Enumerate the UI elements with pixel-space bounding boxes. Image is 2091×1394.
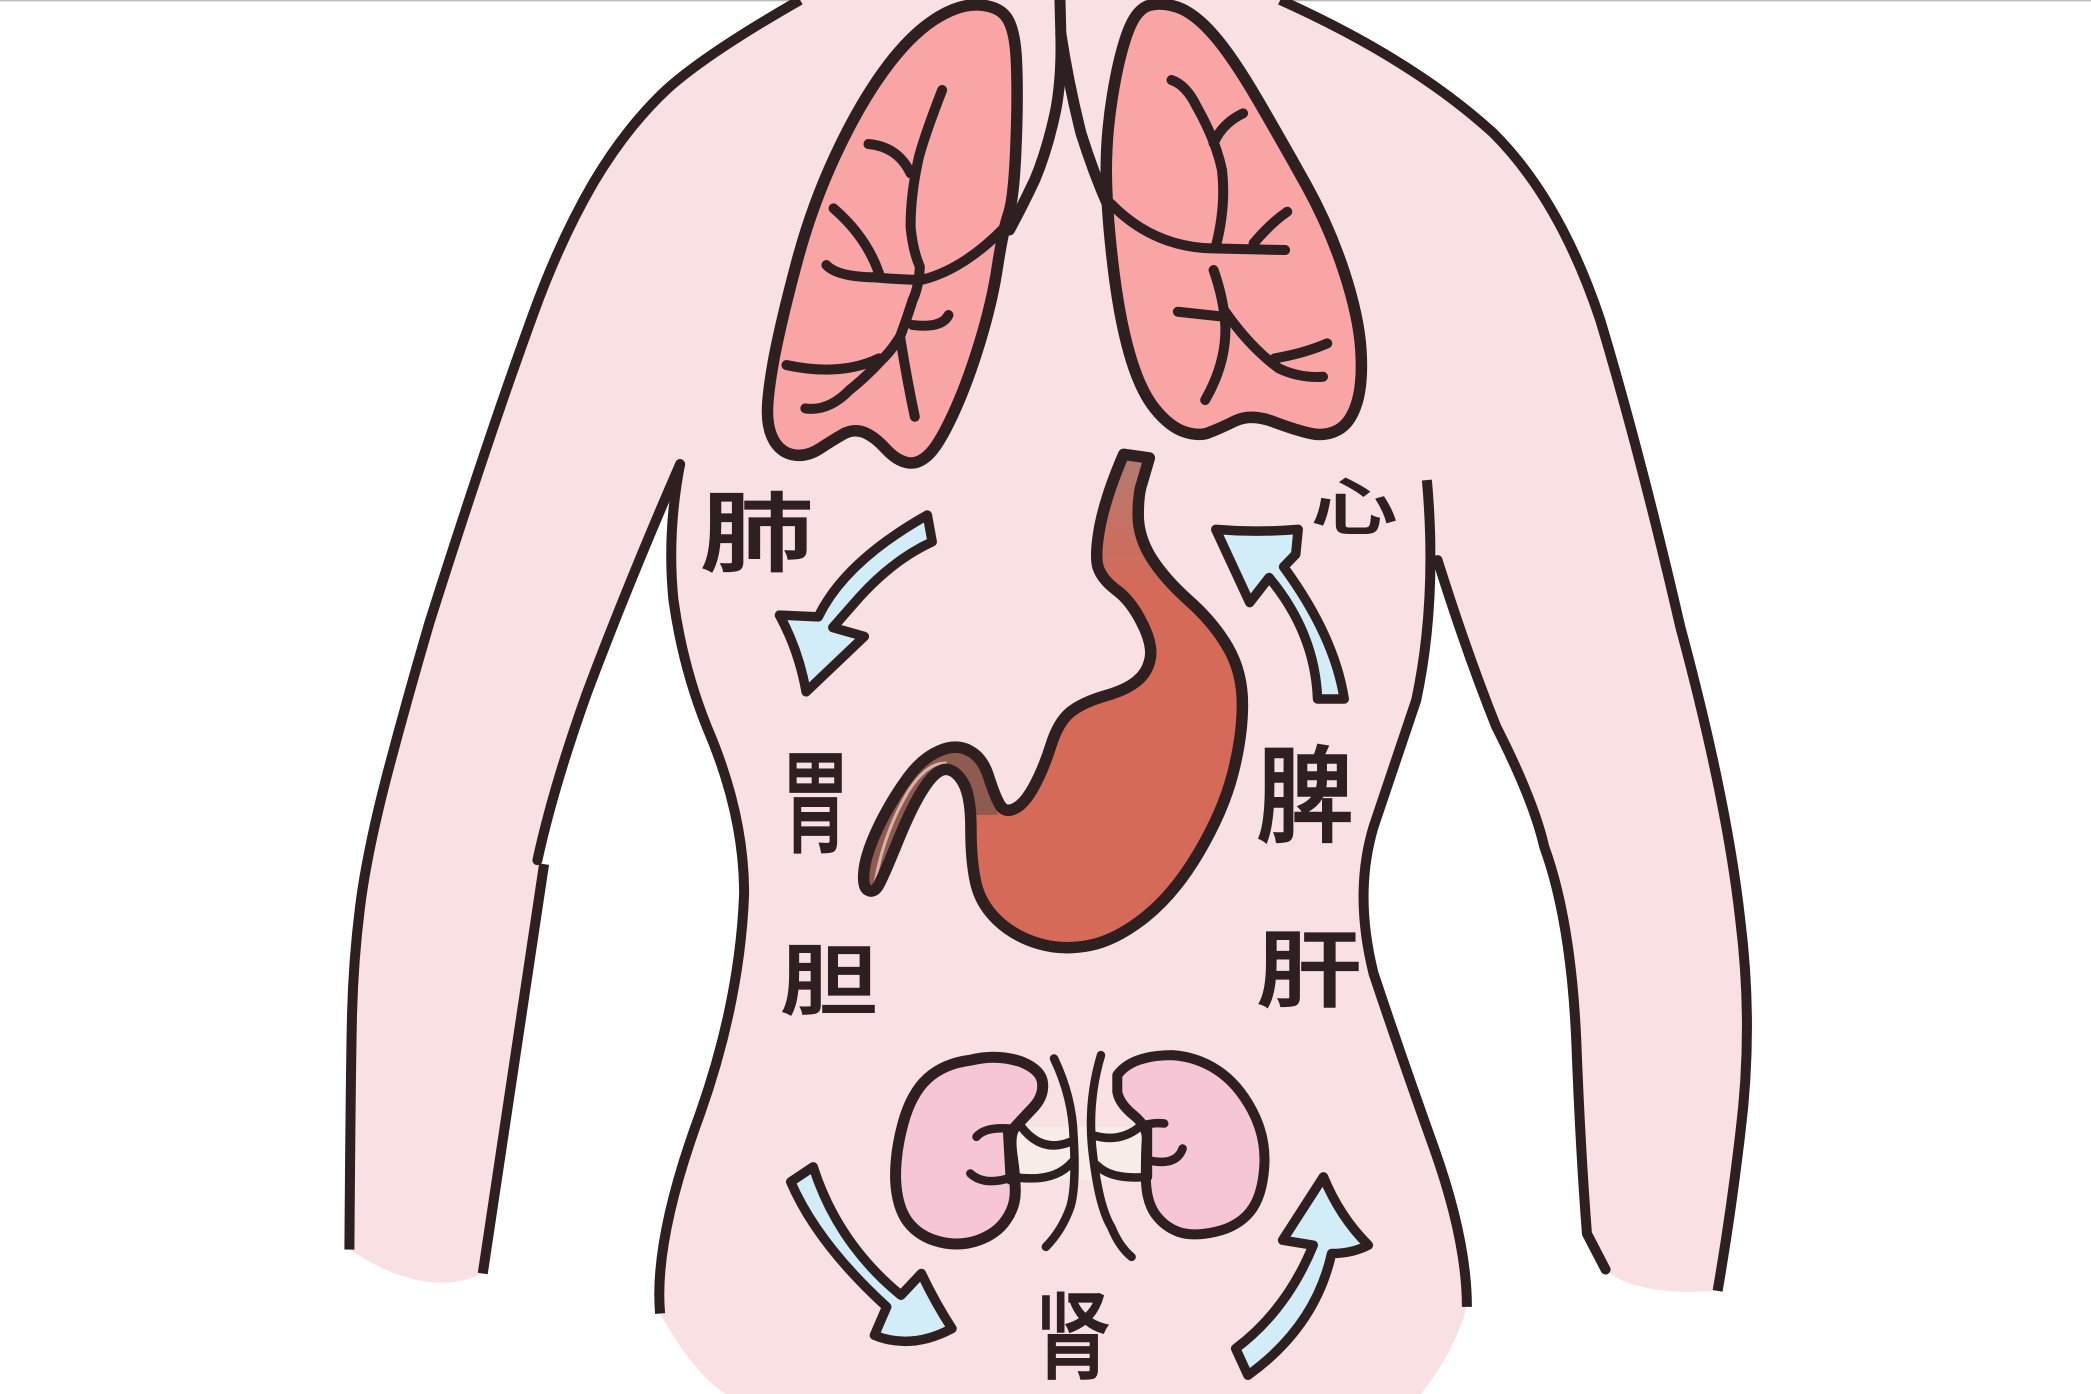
left kidney xyxy=(896,1057,1043,1244)
kidneys and ureters xyxy=(896,1055,1265,1257)
right lung xyxy=(1106,4,1361,435)
label: gallbladder: 胆 xyxy=(780,938,877,1025)
left lung xyxy=(767,5,1017,463)
arrow: lower left xyxy=(791,1167,952,1341)
stomach xyxy=(864,454,1242,948)
body silhouette xyxy=(349,0,1747,1394)
label: stomach: 胃 xyxy=(781,741,849,867)
label: lung: 肺 xyxy=(700,487,813,583)
arrow: lower right xyxy=(1236,1177,1368,1375)
lungs and trachea xyxy=(767,0,1361,463)
label: liver: 肝 xyxy=(1256,925,1362,1019)
label: spleen: 脾 xyxy=(1256,739,1354,856)
arrow: lung to stomach xyxy=(779,515,932,692)
trachea xyxy=(1009,0,1108,230)
label: heart: 心 xyxy=(1311,474,1398,544)
label: kidney: 肾 xyxy=(1035,1286,1111,1392)
arrow: spleen to heart xyxy=(1216,529,1344,699)
right kidney xyxy=(1117,1055,1265,1234)
